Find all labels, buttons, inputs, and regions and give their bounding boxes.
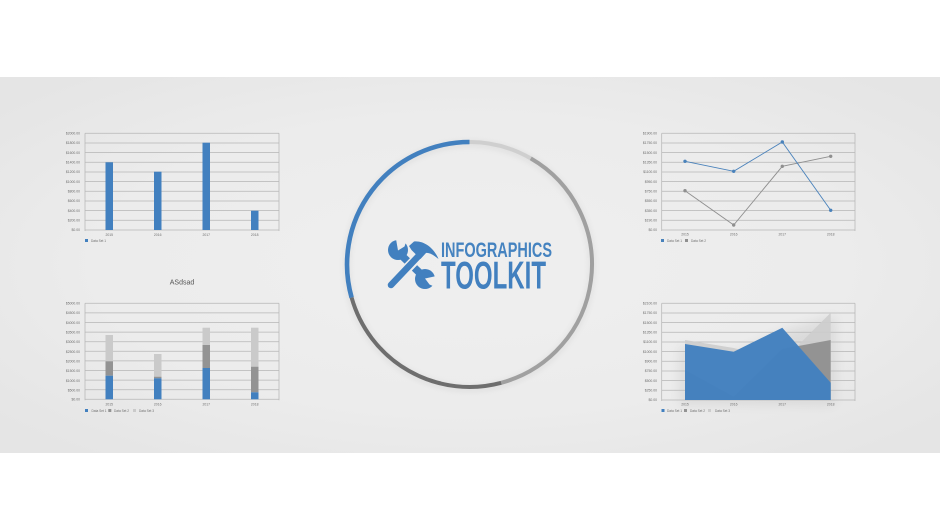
area series 1: [685, 328, 831, 400]
y axis labels: $190.00: [645, 218, 657, 222]
y axis labels: $1100.00: [643, 170, 657, 174]
legend: [662, 409, 730, 413]
y axis labels: $550.00: [645, 199, 657, 203]
legend: Data Set 1: [667, 239, 682, 243]
chart title: ASdsad: [170, 280, 194, 286]
y axis labels: $1500.00: [643, 151, 657, 155]
x axis labels: 2015: [106, 233, 113, 237]
legend: Data Set 2: [690, 409, 705, 413]
x axis labels: 2016: [730, 232, 738, 236]
x axis labels: 2015: [106, 402, 113, 406]
y axis labels: $2000.00: [66, 132, 80, 136]
legend: Data Set 1: [91, 239, 106, 243]
y axis labels: $2000.00: [66, 360, 80, 364]
x axis labels: 2018: [827, 232, 835, 236]
legend: [85, 409, 154, 413]
bars: [106, 143, 258, 230]
overlap shading: [685, 346, 831, 400]
y axis labels: [66, 132, 80, 232]
y axis labels: $250.00: [645, 388, 657, 392]
y axis labels: $750.00: [645, 190, 657, 194]
x axis labels: 2017: [779, 402, 786, 406]
x axis labels: 2018: [251, 402, 259, 406]
y axis labels: $200.00: [68, 218, 80, 222]
y axis labels: $0.00: [648, 228, 657, 232]
stacked bars: [106, 328, 258, 399]
legend: Data Set 2: [691, 239, 706, 243]
x axis labels: 2017: [203, 402, 210, 406]
x axis labels: 2018: [251, 233, 259, 237]
panel: area chart bottom right: [643, 302, 855, 413]
y axis labels: $1800.00: [66, 141, 80, 145]
y axis labels: $1100.00: [643, 340, 657, 344]
area series 2: [685, 340, 831, 400]
grid lines: [85, 303, 279, 400]
x axis labels: 2017: [203, 233, 210, 237]
y axis labels: $4000.00: [66, 321, 80, 325]
y axis labels: $4500.00: [66, 311, 80, 315]
ring segments: [347, 142, 592, 387]
y axis labels: [643, 302, 657, 402]
ring segment: light gray: [470, 142, 531, 158]
x axis labels: 2017: [779, 232, 786, 236]
y axis labels: $1400.00: [66, 160, 80, 164]
y axis labels: $3500.00: [66, 330, 80, 334]
ring segment: blue: [347, 142, 470, 298]
legend: Data Set 2: [114, 409, 129, 413]
y axis labels: $1000.00: [643, 350, 657, 354]
y axis labels: $2500.00: [66, 350, 80, 354]
y axis labels: $1350.00: [643, 330, 657, 334]
y axis labels: $0.00: [648, 398, 657, 402]
grid lines: [85, 133, 279, 231]
ring segment: medium gray: [501, 158, 592, 383]
y axis labels: $900.00: [645, 360, 657, 364]
y axis labels: $400.00: [68, 209, 80, 213]
y axis labels: $1900.00: [643, 132, 657, 136]
x axis labels: 2018: [827, 402, 835, 406]
logo text: TOOLKIT: TOOLKIT: [441, 254, 546, 298]
legend: [661, 239, 706, 243]
y axis labels: $3000.00: [66, 340, 80, 344]
legend: Data Set 1: [667, 409, 682, 413]
legend: Data Set 3: [715, 409, 730, 413]
panel: center ring: [347, 142, 592, 388]
y axis labels: $950.00: [645, 180, 657, 184]
x axis labels: [681, 402, 835, 406]
background band: [0, 77, 940, 453]
y axis labels: $1750.00: [643, 311, 657, 315]
y axis labels: $1000.00: [66, 180, 80, 184]
x axis labels: [106, 233, 259, 237]
legend: Data Set 3: [139, 409, 154, 413]
x axis labels: 2016: [154, 233, 162, 237]
x axis labels: [681, 232, 835, 236]
line series 2: [683, 155, 832, 227]
x axis labels: 2015: [681, 402, 689, 406]
y axis labels: $5000.00: [66, 302, 80, 306]
y axis labels: $2100.00: [643, 302, 657, 306]
y axis labels: $500.00: [68, 388, 80, 392]
panel: bar chart top left: [66, 132, 279, 243]
grid lines: [662, 303, 855, 401]
y axis labels: $1600.00: [66, 151, 80, 155]
y axis labels: $350.00: [645, 209, 657, 213]
ring soft shadow: [347, 144, 592, 388]
y axis labels: $600.00: [68, 199, 80, 203]
panel: stacked bar chart bottom left: [66, 302, 279, 413]
legend: Data Set 1: [92, 409, 107, 413]
wrench: [388, 239, 438, 289]
x axis labels: [106, 402, 259, 406]
panel: line chart top right: [643, 132, 855, 243]
y axis labels: $1500.00: [66, 369, 80, 373]
y axis labels: [66, 302, 80, 402]
y axis labels: $750.00: [645, 369, 657, 373]
logo text: INFOGRAPHICS: INFOGRAPHICS: [441, 239, 552, 262]
ring segment: dark gray: [352, 298, 501, 387]
area series 3: [685, 313, 831, 400]
y axis labels: $1350.00: [643, 160, 657, 164]
area shadow: [680, 316, 835, 404]
x axis labels: 2015: [681, 232, 689, 236]
y axis labels: $0.00: [72, 228, 80, 232]
icon: wrench and hammer: [388, 239, 438, 289]
y axis labels: [643, 132, 657, 232]
grid lines: [662, 133, 855, 231]
y axis labels: $1200.00: [66, 170, 80, 174]
y axis labels: $1750.00: [643, 141, 657, 145]
y axis labels: $1500.00: [643, 321, 657, 325]
line series 1: [683, 140, 832, 212]
y axis labels: $1000.00: [66, 379, 80, 383]
y axis labels: $500.00: [645, 379, 657, 383]
y axis labels: $800.00: [68, 190, 80, 194]
x axis labels: 2016: [154, 402, 162, 406]
hammer: [391, 241, 438, 285]
x axis labels: 2016: [730, 402, 738, 406]
y axis labels: $0.00: [72, 398, 80, 402]
